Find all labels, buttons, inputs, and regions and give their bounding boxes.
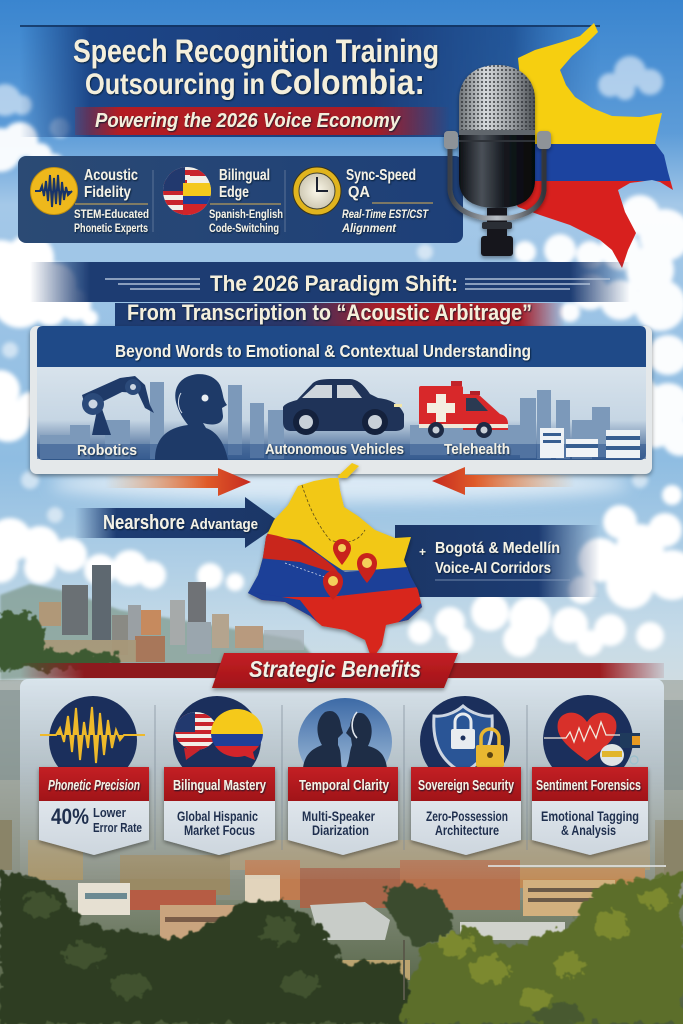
card: temporal clarity: Multi-Speaker	[302, 809, 376, 824]
city silhouette	[37, 382, 646, 462]
icon: heart with EKG	[543, 695, 640, 785]
map: Colombia with city pins	[246, 463, 424, 653]
card: temporal clarity: Diarization	[312, 823, 369, 838]
icon: clock	[293, 167, 341, 215]
stat text: sync-speed QA: Alignment	[341, 223, 397, 235]
stat text: sync-speed QA: Real-Time EST/CST	[342, 209, 429, 221]
arrow: left-pointing	[432, 467, 575, 495]
card: temporal clarity	[288, 698, 398, 855]
title: Speech Recognition Training	[73, 33, 439, 69]
stat text: acoustic fidelity: Acoustic	[84, 167, 138, 184]
heading: strategic benefits: Strategic Benefits	[249, 656, 421, 682]
icon: studio microphone	[444, 65, 551, 256]
card: temporal clarity: Temporal Clarity	[299, 778, 389, 794]
stat text: bilingual edge: Code-Switching	[209, 223, 279, 235]
title: Colombia:	[270, 63, 425, 102]
card: sentiment forensics: Sentiment Forensics	[536, 778, 641, 794]
arrow: right-pointing	[105, 468, 251, 496]
panel: stats strip	[18, 156, 463, 243]
background: foreground trees	[0, 870, 683, 1024]
background: distant city skyline	[0, 565, 320, 680]
title	[73, 33, 439, 102]
card: sovereign security: Sovereign Security	[418, 778, 514, 794]
stat text: sync-speed QA	[341, 167, 429, 235]
band: voice-AI corridors: +	[419, 545, 426, 559]
icon: pin 2	[357, 553, 377, 583]
card: bilingual mastery: Global Hispanic	[177, 809, 258, 824]
icon: pin 3	[323, 571, 343, 600]
card: bilingual mastery: Bilingual Mastery	[173, 778, 266, 794]
icon: speech bubbles with flags	[173, 696, 263, 767]
band: voice-AI corridors	[395, 525, 600, 597]
band: nearshore advantage	[75, 497, 281, 548]
band: voice-AI corridors: Voice-AI Corridors	[435, 560, 551, 577]
card: phonetic precision: Phonetic Precision	[48, 778, 140, 794]
band: nearshore advantage: Advantage	[190, 516, 258, 533]
red subtitle band	[75, 107, 450, 135]
icon: US and Colombia flag	[163, 167, 211, 216]
card: bilingual mastery: Market Focus	[184, 823, 255, 838]
card: sentiment forensics	[532, 695, 648, 855]
panel: strategic benefits	[20, 653, 664, 879]
band: nearshore advantage: Nearshore	[103, 512, 185, 534]
background: lower campus buildings	[0, 680, 683, 980]
card: sovereign security: Architecture	[435, 823, 499, 838]
card: bilingual mastery	[164, 696, 275, 855]
stat text: bilingual edge: Bilingual	[219, 167, 270, 184]
stat text: acoustic fidelity: Fidelity	[84, 184, 131, 201]
card: sovereign security: Zero-Possession	[426, 809, 508, 824]
icon: ambulance	[419, 381, 508, 438]
icon: robotic arm	[82, 376, 154, 435]
card: sentiment forensics: Emotional Tagging	[541, 809, 639, 824]
stat text: bilingual edge: Edge	[219, 184, 249, 201]
heading band lower	[115, 303, 565, 329]
card: sentiment forensics: & Analysis	[561, 823, 616, 838]
stat text: acoustic fidelity	[74, 167, 149, 235]
card: sovereign security	[411, 696, 521, 855]
label: panel heading: Beyond Words to Emotional & Contextual Understanding	[115, 341, 531, 361]
heading: paradigm shift: From Transcription to “Acoustic Arbitrage”	[127, 300, 532, 325]
band: voice-AI corridors: Bogotá & Medellín	[435, 540, 560, 557]
stat text: sync-speed QA: Sync-Speed	[346, 167, 416, 184]
label: telehealth: Telehealth	[444, 441, 510, 458]
icon: AI head silhouette	[155, 374, 228, 460]
icon: autonomous car	[283, 379, 404, 435]
stat text: bilingual edge	[209, 167, 283, 235]
label: robotics: Robotics	[77, 442, 137, 459]
heading: paradigm shift: The 2026 Paradigm Shift:	[210, 271, 458, 296]
heading: paradigm shift	[127, 271, 532, 325]
stat text: acoustic fidelity: Phonetic Experts	[74, 223, 148, 235]
card: phonetic precision: 40%	[51, 804, 89, 829]
icon: golden waveform	[40, 696, 145, 784]
icon: two speaker silhouettes	[298, 698, 392, 786]
stat text: bilingual edge: Spanish-English	[209, 209, 283, 221]
icon: pin 1	[333, 539, 351, 565]
map: Colombia flag large	[516, 23, 673, 268]
section band: paradigm shift	[30, 262, 630, 329]
card: phonetic precision: Lower	[93, 805, 126, 820]
stat text: sync-speed QA: QA	[348, 184, 370, 201]
icon: acoustic waveform	[30, 168, 78, 214]
stat text: acoustic fidelity: STEM-Educated	[74, 209, 149, 221]
heading: strategic benefits	[212, 653, 458, 688]
label: autonomous vehicles: Autonomous Vehicles	[265, 441, 404, 458]
title: Outsourcing in	[85, 68, 265, 101]
card: phonetic precision: Error Rate	[93, 820, 142, 835]
panel: beyond words	[30, 326, 652, 474]
card: phonetic precision	[39, 696, 149, 855]
header panel	[20, 25, 600, 137]
icon: shield and padlock	[420, 696, 510, 786]
subtitle: Powering the 2026 Voice Economy	[95, 110, 401, 132]
